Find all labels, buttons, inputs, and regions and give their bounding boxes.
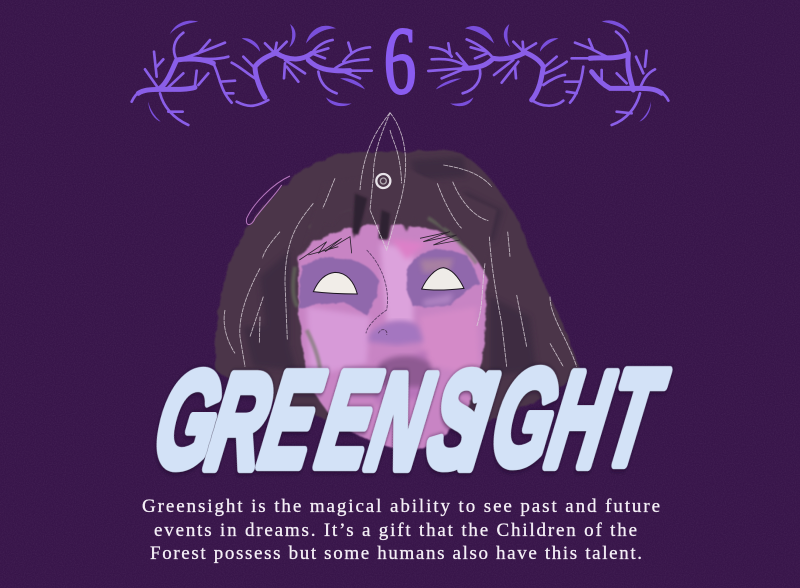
hair darker strands (243, 157, 537, 377)
hair (215, 150, 580, 428)
nose and mouth shading (368, 321, 423, 345)
title: GREENSIGHT (144, 343, 676, 497)
eye shadows (298, 258, 378, 315)
face highlights (298, 238, 480, 403)
fringe (297, 170, 497, 270)
eye: left (313, 272, 357, 294)
number 6: 6 (384, 8, 416, 114)
line 3: Forest possess but some humans also have this talent. (150, 543, 642, 564)
eyebrows (299, 232, 460, 260)
line 2: events in dreams. It’s a gift that the Children of the (154, 520, 637, 541)
forehead jewel (376, 174, 390, 188)
line 1: Greensight is the magical ability to see past and future (142, 496, 660, 517)
description text (142, 496, 660, 564)
eye: right (422, 268, 464, 290)
nose sketch (366, 250, 387, 335)
white sketch lines (224, 113, 577, 367)
pink stray line (246, 176, 290, 225)
dark feather strands (353, 193, 390, 240)
illustration: face with white eyes (215, 113, 580, 451)
green hair fringe tint (293, 207, 477, 368)
face skin (298, 225, 487, 451)
ornament: left branches (132, 21, 372, 125)
ornament: right branches (428, 20, 668, 125)
